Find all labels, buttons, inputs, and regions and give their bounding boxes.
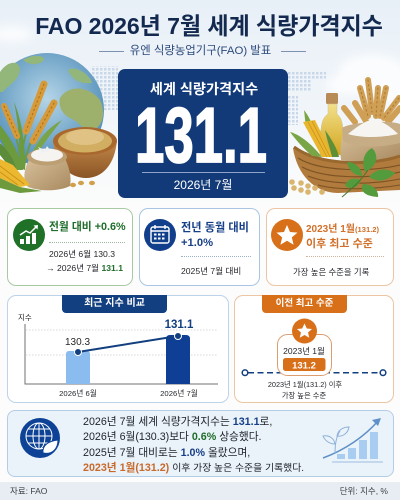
panel: month over month [7, 208, 133, 286]
panel heading: 이전 최고 수준 [276, 298, 333, 309]
panel heading: 세계 식량가격지수 [150, 82, 258, 98]
bar: July [166, 335, 190, 384]
panel: recent index comparison [7, 295, 229, 403]
title: FAO 2026년 7월 세계 식량가격지수 [35, 13, 383, 39]
summary text: 2026년 7월 세계 식량가격지수는 131.1로, [83, 416, 272, 428]
icon: calendar [144, 219, 176, 251]
footer bar [0, 482, 400, 500]
timeline graphic [241, 318, 387, 400]
timeline graphic: 가장 높은 수준 [282, 391, 326, 400]
basket [293, 147, 400, 193]
card heading: 이후 최고 수준 [306, 238, 373, 250]
sack of rice [340, 120, 400, 162]
panel date: 2026년 7월 [174, 178, 232, 192]
timeline graphic: 2023년 1월 [283, 346, 325, 356]
summary text: 2025년 7월 대비로는 1.0% 올랐으며, [83, 447, 250, 459]
bar chart: 2026년 7월 [160, 388, 198, 398]
panel: summary [7, 410, 394, 477]
background sky [0, 0, 400, 205]
card heading: +1.0% [181, 237, 213, 249]
card text with latest value: → 2026년 7월 131.1 [46, 263, 123, 273]
panel: highest since [266, 208, 394, 286]
summary text: 2023년 1월(131.2) 이후 가장 높은 수준을 기록했다. [83, 462, 304, 474]
corn left [0, 159, 95, 193]
icon: growth chart with sprout [322, 418, 383, 462]
bar chart [18, 313, 218, 398]
summary text [83, 416, 304, 474]
panel: headline index value [118, 69, 288, 198]
sack left [24, 146, 71, 190]
card heading: 2023년 1월(131.2) [306, 224, 379, 235]
card text: 2025년 7월 대비 [181, 266, 241, 276]
card heading: 전월 대비 +0.6% [49, 221, 126, 233]
trend line [78, 336, 178, 352]
axis labels: 2026년 6월 [59, 388, 97, 398]
wheat left [0, 84, 62, 170]
bowl of grain [53, 127, 117, 178]
card heading [306, 223, 379, 250]
chart heading [62, 295, 167, 313]
timeline graphic: 2023년 1월(131.2) 이후 [268, 380, 342, 389]
icon: rising bar chart [13, 219, 45, 251]
panel: year over year [139, 208, 260, 286]
summary text: 2026년 6월(130.3)보다 0.6% 상승했다. [83, 431, 262, 443]
source: 자료: FAO [10, 486, 47, 496]
timeline graphic: 131.2 [292, 360, 316, 372]
panel heading [262, 295, 347, 313]
card heading: 전년 동월 대비 [181, 222, 249, 234]
subtitle: 유엔 식량농업기구(FAO) 발표 [130, 45, 271, 57]
value labels: 130.3 [65, 337, 90, 348]
corn right [290, 110, 339, 157]
bar chart: 131.1 [165, 319, 194, 331]
wheat right [344, 80, 400, 122]
icon: star [271, 219, 303, 251]
globe [0, 53, 104, 167]
bottle of oil [320, 93, 344, 155]
icon: globe with leaf [20, 418, 60, 458]
panel: previous highest level [234, 295, 394, 403]
chart heading: 최근 지수 비교 [84, 298, 145, 309]
green leaves [342, 148, 395, 197]
unit: 단위: 지수, % [340, 486, 388, 496]
soybeans [289, 179, 325, 195]
bar chart: 지수 [18, 313, 32, 322]
card heading [181, 221, 249, 249]
world map dots [92, 66, 326, 125]
background clouds and illustrations [0, 26, 400, 198]
card text: 가장 높은 수준을 기록 [293, 267, 369, 277]
card text: 2026년 6월 130.3 [49, 249, 115, 259]
bar: June [66, 351, 90, 384]
